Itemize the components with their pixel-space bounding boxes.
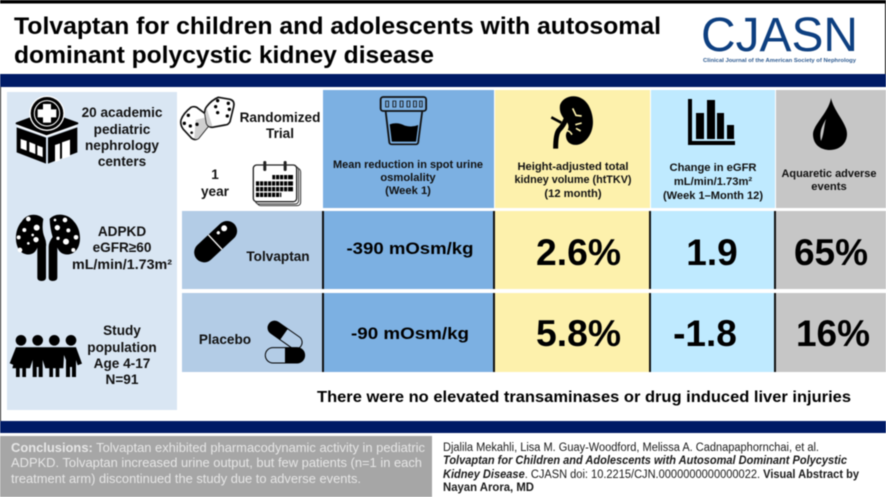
panel: conclusions	[0, 436, 432, 497]
icon: kidney	[551, 96, 593, 149]
row: placebo results	[322, 293, 886, 372]
icon: children	[10, 335, 82, 377]
icon: tolvaptan pill	[190, 217, 241, 266]
text: ADPKD: ADPKD	[98, 224, 146, 239]
icon: polycystic kidneys	[16, 215, 80, 281]
citation: Nayan Arora, MD	[443, 482, 534, 494]
icon: water drop	[813, 98, 847, 150]
text: aquaretic header	[782, 168, 876, 193]
text: tolvaptan: Tolvaptan	[246, 249, 310, 264]
footer band	[0, 421, 886, 433]
text: ADPKD: mL/min/1.73m²	[72, 257, 172, 272]
column: kidney volume	[495, 90, 650, 208]
text: 1 year: year	[201, 184, 230, 199]
text: eGFR header: Change in eGFR	[669, 162, 757, 174]
value: placebo aquaretic: 16%	[796, 313, 870, 354]
value: tolvaptan osmolality: -390 mOsm/kg	[346, 239, 474, 258]
text: placebo: Placebo	[199, 332, 251, 347]
citation	[443, 442, 860, 494]
text: htTKV header: Height-adjusted total	[518, 161, 628, 173]
header band	[0, 74, 886, 87]
text: centers: nephrology	[85, 138, 159, 153]
text: randomized trial: Trial	[266, 126, 294, 141]
text: ADPKD	[72, 224, 172, 272]
text: study population: N=91	[106, 372, 139, 387]
panel: study design	[7, 92, 177, 410]
text: study population: Study	[103, 323, 141, 338]
panel: conclusions: ADPKD. Tolvaptan increased urine output, but few patients (n=1 in each	[11, 456, 422, 470]
text: eGFR header: (Week 1–Month 12)	[663, 190, 763, 202]
citation: Tolvaptan for Children and Adolescents with Autosomal Dominant Polycystic	[443, 455, 848, 467]
icon: dice	[181, 97, 234, 139]
value: placebo htTKV: 5.8%	[536, 313, 621, 354]
text: study population	[87, 323, 157, 387]
citation: Djalila Mekahli, Lisa M. Guay-Woodford, Melissa A. Cadnapaphornchai, et al.	[443, 442, 819, 454]
text: ADPKD: eGFR≥60	[93, 240, 151, 255]
column: aquaretic events	[776, 90, 886, 208]
logo: CJASN: CJASN	[701, 9, 858, 62]
panel: conclusions: Conclusions: Tolvaptan exhibited pharmacodynamic activity in pediatric	[11, 441, 425, 455]
title: dominant polycystic kidney disease	[14, 42, 434, 69]
text: htTKV header: kidney volume (htTKV)	[514, 174, 632, 186]
panel: placebo label	[182, 293, 322, 372]
value: tolvaptan eGFR: 1.9	[686, 232, 738, 273]
icon: urine cup	[381, 97, 426, 144]
icon: hospital building	[17, 96, 77, 164]
panel: conclusions: treatment arm) discontinued the study due to adverse events.	[11, 472, 361, 486]
safety note: There were no elevated transaminases or drug induced liver injuries	[317, 389, 851, 406]
text: aquaretic header: events	[811, 181, 847, 193]
text: osmolality header: (Week 1)	[385, 185, 431, 197]
text: osmolality header	[333, 159, 483, 197]
title	[14, 13, 661, 69]
text: htTKV header: (12 month)	[544, 188, 602, 200]
text: centers: 20 academic	[82, 105, 163, 120]
text: study population: population	[87, 340, 157, 355]
panel: tolvaptan label	[182, 211, 322, 289]
value: placebo eGFR: -1.8	[673, 313, 737, 354]
icon: calendar	[253, 161, 301, 206]
row: tolvaptan results	[322, 211, 886, 289]
text: eGFR header: mL/min/1.73m²	[674, 176, 752, 188]
value: tolvaptan htTKV: 2.6%	[536, 232, 621, 273]
text: randomized trial	[240, 110, 320, 141]
text: osmolality header: osmolality	[380, 172, 436, 184]
text: centers: centers	[98, 154, 146, 169]
logo: CJASN: Clinical Journal of the American Society of Nephrology	[703, 58, 857, 64]
value: tolvaptan aquaretic: 65%	[794, 232, 868, 273]
text: htTKV header	[514, 161, 632, 200]
text: 1 year: 1	[211, 167, 219, 182]
icon: bar chart	[688, 99, 735, 145]
text: study population: Age 4-17	[94, 356, 150, 371]
column: urine osmolality	[323, 90, 494, 208]
text: aquaretic header: Aquaretic adverse	[782, 168, 876, 180]
text: centers	[82, 105, 163, 169]
text: randomized trial: Randomized	[240, 110, 320, 125]
text: centers: pediatric	[94, 122, 151, 137]
title: Tolvaptan for children and adolescents with autosomal	[14, 13, 661, 40]
icon: placebo capsules	[265, 319, 305, 363]
text: 1 year	[201, 167, 230, 199]
citation: Kidney Disease. CJASN doi: 10.2215/CJN.0000000000000022. Visual Abstract by	[443, 469, 860, 481]
text: eGFR header	[663, 162, 763, 202]
column: eGFR	[651, 90, 775, 208]
value: placebo osmolality: -90 mOsm/kg	[351, 324, 469, 343]
text: osmolality header: Mean reduction in spot urine	[333, 159, 483, 171]
